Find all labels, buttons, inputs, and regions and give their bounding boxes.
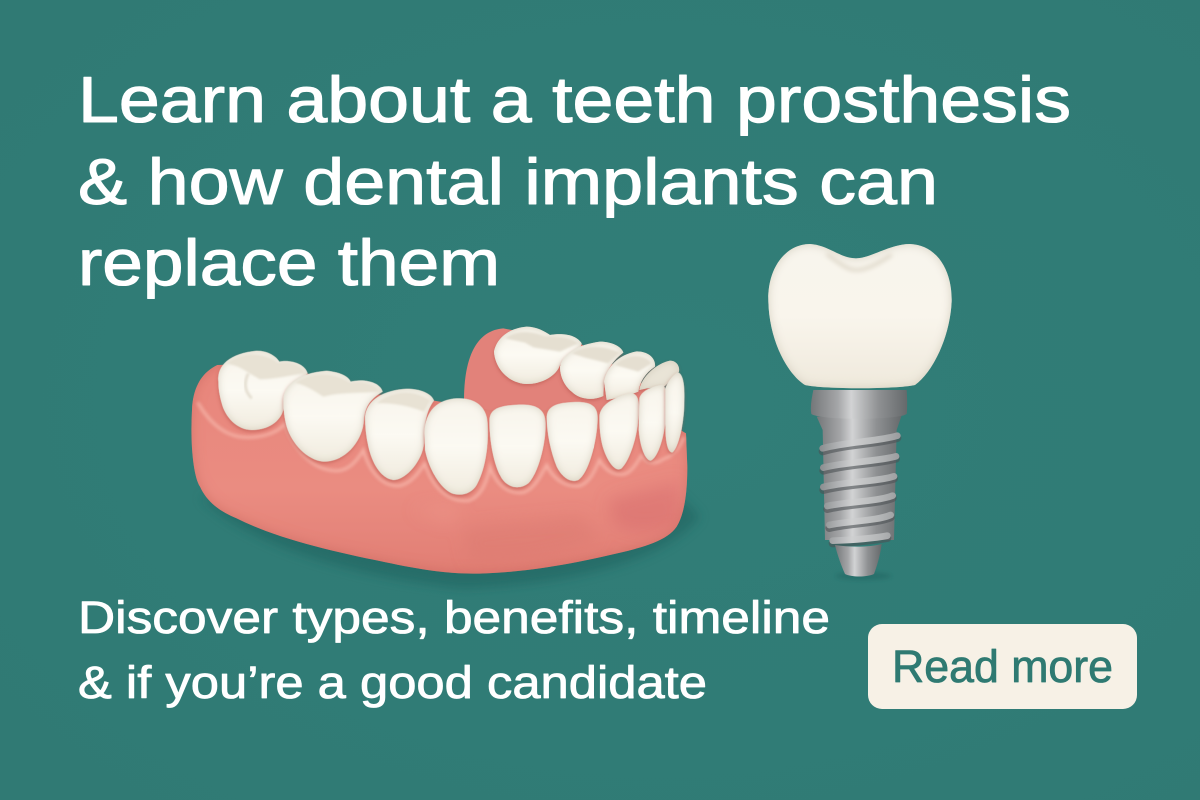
incisor 1 <box>489 405 546 487</box>
implant shadow <box>835 572 892 580</box>
subtitle <box>78 592 830 708</box>
back premolar 4 <box>639 361 679 390</box>
canine <box>424 398 488 495</box>
premolar <box>365 389 434 480</box>
molar 1 <box>218 351 308 430</box>
denture shadow <box>200 497 700 588</box>
back molar 2 <box>560 342 623 399</box>
main gum base <box>191 363 687 574</box>
implant tip <box>835 544 882 576</box>
title: Learn about a teeth prosthesis <box>78 63 1071 136</box>
implant threads <box>823 438 897 543</box>
illustration: dental implant <box>768 244 952 580</box>
illustration: lower denture <box>191 327 700 588</box>
subtitle: & if you’re a good candidate <box>78 657 707 708</box>
incisor 5 <box>665 372 684 452</box>
subtitle: Discover types, benefits, timeline <box>78 592 830 643</box>
title: & how dental implants can <box>78 145 938 218</box>
molar 2 <box>283 371 383 462</box>
title <box>78 63 1071 299</box>
incisor 3 <box>599 393 639 469</box>
button: read more <box>868 624 1137 709</box>
gum mottling <box>612 484 682 530</box>
incisor 4 <box>639 385 667 461</box>
back gum <box>464 328 683 450</box>
gum margin highlight <box>198 403 683 501</box>
implant crown <box>768 244 952 388</box>
implant collar <box>811 390 907 419</box>
implant screw body <box>817 415 902 540</box>
title: replace them <box>78 226 500 299</box>
incisor 2 <box>547 402 598 481</box>
button: read more: Read more <box>892 641 1113 692</box>
crown top groove <box>827 254 892 270</box>
back premolar 3 <box>604 351 655 400</box>
back molar 1 <box>494 327 582 384</box>
